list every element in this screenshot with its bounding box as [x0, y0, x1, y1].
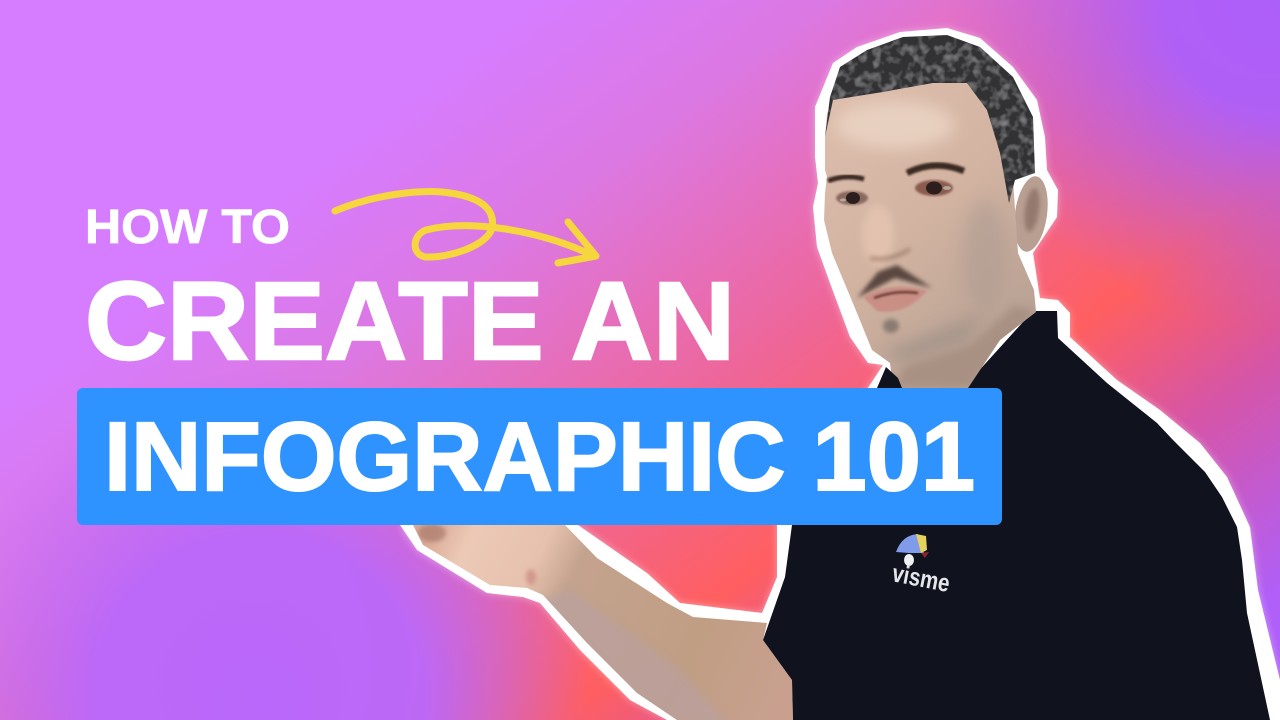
shirt logo: visme — [890, 534, 952, 598]
collar left — [877, 367, 902, 388]
blue banner — [77, 388, 1002, 525]
wrist crease — [526, 569, 536, 585]
fingers shadow — [418, 524, 446, 542]
logo mark — [896, 534, 929, 566]
black polo shirt — [763, 311, 1270, 720]
heading: create an: CREATE AN — [85, 260, 735, 383]
heading: how to: HOW TO — [85, 201, 290, 254]
mouth — [863, 287, 927, 312]
hair — [825, 35, 1035, 203]
face and neck — [815, 80, 1045, 390]
person cut-out — [400, 28, 1280, 720]
eyebrow: right — [907, 165, 964, 173]
eye: right — [915, 180, 953, 196]
moustache — [857, 265, 932, 298]
ear — [1010, 174, 1052, 254]
banner heading: infographic 101: INFOGRAPHIC 101 — [104, 402, 975, 511]
soft halo around cut-out — [400, 28, 1280, 720]
logo wordmark: visme — [890, 559, 952, 598]
goatee — [883, 319, 899, 333]
arm and hand — [400, 520, 800, 720]
arm lower shading — [540, 590, 730, 720]
white cut-out outline — [400, 28, 1280, 720]
eyebrow: left — [828, 177, 864, 181]
nose shadow — [870, 249, 910, 259]
arrow: yellow hand-drawn — [335, 192, 596, 263]
eye: left — [836, 191, 868, 205]
